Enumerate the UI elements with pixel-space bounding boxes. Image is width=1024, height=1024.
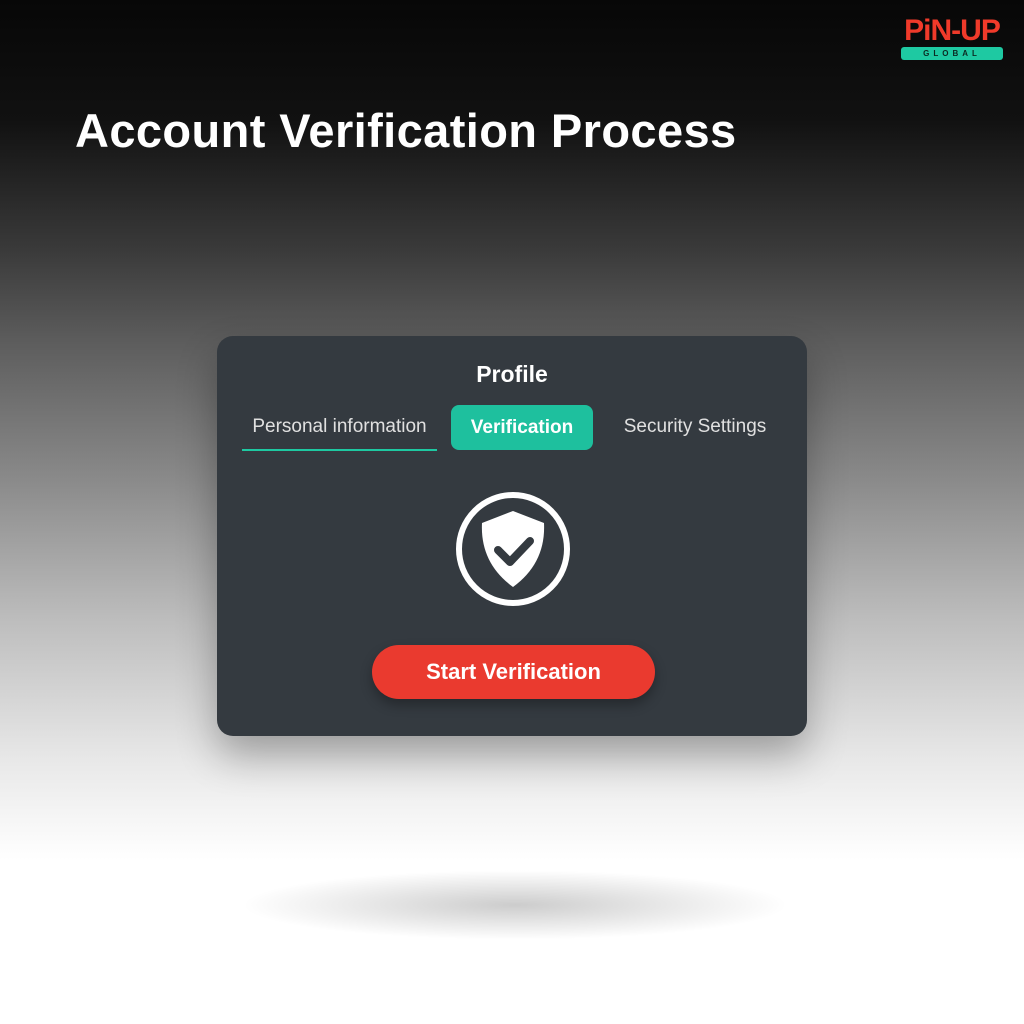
card heading: Profile <box>476 361 548 387</box>
title: Account Verification Process <box>75 104 737 157</box>
panel: profile card <box>217 336 807 736</box>
icon: shield check <box>456 492 570 606</box>
button: start verification <box>372 645 655 699</box>
floor shadow <box>240 870 790 940</box>
tab: personal information <box>242 416 437 451</box>
button: start verification: Start Verification <box>426 659 601 684</box>
tab: personal information: Personal information <box>252 416 427 437</box>
logo <box>901 14 1003 60</box>
logo: PiN-UP <box>904 14 1000 47</box>
tab: verification active <box>451 405 593 450</box>
logo: GLOBAL <box>923 49 981 58</box>
tab: verification active: Verification <box>471 417 573 438</box>
tab: security settings: Security Settings <box>624 416 766 437</box>
